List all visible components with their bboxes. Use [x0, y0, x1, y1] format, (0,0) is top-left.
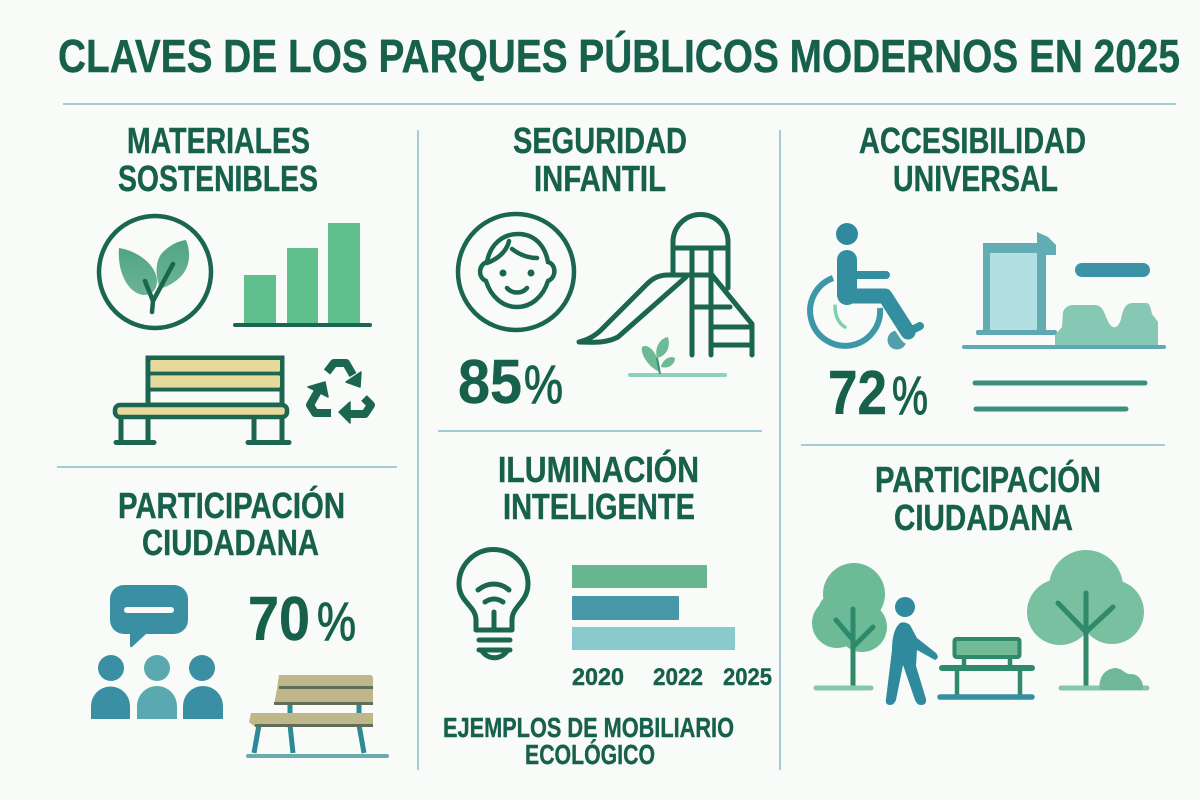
heading: accesibilidad universal: UNIVERSAL: [893, 158, 1058, 199]
statistic: 85%: [458, 348, 563, 417]
panel: participación ciudadana left: [91, 484, 387, 756]
heading: accesibilidad universal: ACCESIBILIDAD: [859, 120, 1086, 161]
heading: seguridad infantil: INFANTIL: [534, 158, 666, 199]
icon: playground slide: [579, 214, 752, 355]
heading: seguridad infantil: [513, 120, 687, 199]
statistic: 72%: 72: [828, 359, 887, 428]
heading: materiales sostenibles: [118, 120, 318, 199]
icon: child face: [458, 214, 574, 330]
statistic: 70%: [248, 585, 356, 654]
icon: small plant: [630, 337, 725, 375]
icon: recycling arrows: [308, 363, 371, 423]
icon: leaves in circle: [99, 216, 211, 328]
heading: participación ciudadana: CIUDADANA: [142, 522, 319, 563]
bar chart: horizontal years: [572, 565, 772, 691]
bar chart: growth: [235, 223, 370, 325]
statistic: 72%: [828, 359, 928, 428]
text lines placeholder: [975, 383, 1145, 409]
heading: participación ciudadana right: [875, 458, 1101, 538]
panel: materiales sostenibles: [99, 120, 371, 442]
heading: participación ciudadana: PARTICIPACIÓN: [118, 484, 345, 526]
panel: iluminación inteligente: [443, 448, 772, 770]
heading: iluminación inteligente: [498, 448, 699, 527]
bar chart: horizontal years: 2020: [572, 664, 624, 691]
heading: materiales sostenibles: MATERIALES: [127, 120, 310, 161]
caption: ejemplos de mobiliario: EJEMPLOS DE MOBILIARIO: [443, 712, 734, 743]
heading: participación ciudadana right: PARTICIPACIÓN: [875, 458, 1101, 500]
statistic: 70%: %: [317, 592, 356, 652]
icon: smart light bulb: [459, 550, 528, 658]
icon: group of people: [91, 655, 223, 719]
bar chart: horizontal years: 2022: [653, 664, 703, 691]
caption: ejemplos de mobiliario: ECOLÓGICO: [525, 739, 655, 770]
panel: seguridad infantil: [458, 120, 752, 417]
panel: participación ciudadana right: [812, 458, 1147, 705]
icon: park bench: [940, 639, 1032, 697]
icon: wooden bench: [115, 358, 289, 442]
icon: wheelchair user: [810, 223, 920, 350]
icon: large tree: [1027, 550, 1147, 690]
heading: accesibilidad universal: [859, 120, 1086, 199]
heading: iluminación inteligente: ILUMINACIÓN: [498, 448, 699, 490]
icon: accessible kiosk: [964, 232, 1164, 347]
heading: seguridad infantil: SEGURIDAD: [513, 120, 687, 161]
heading: participación ciudadana right: CIUDADANA: [894, 497, 1073, 538]
icon: small tree: [812, 563, 887, 688]
statistic: 70%: 70: [248, 585, 310, 654]
caption: ejemplos de mobiliario: [443, 712, 734, 770]
icon: speech bubble: [110, 585, 188, 647]
statistic: 85%: %: [524, 355, 563, 415]
icon: walking person: [886, 597, 938, 705]
bar chart: horizontal years: 2025: [723, 664, 772, 691]
statistic: 85%: 85: [458, 348, 522, 417]
icon: eco bench: [248, 675, 387, 756]
heading: participación ciudadana: [118, 484, 345, 563]
heading: iluminación inteligente: INTELIGENTE: [503, 486, 695, 527]
statistic: 72%: %: [892, 366, 928, 426]
panel: accesibilidad universal: [810, 120, 1164, 428]
heading: materiales sostenibles: SOSTENIBLES: [118, 158, 318, 199]
